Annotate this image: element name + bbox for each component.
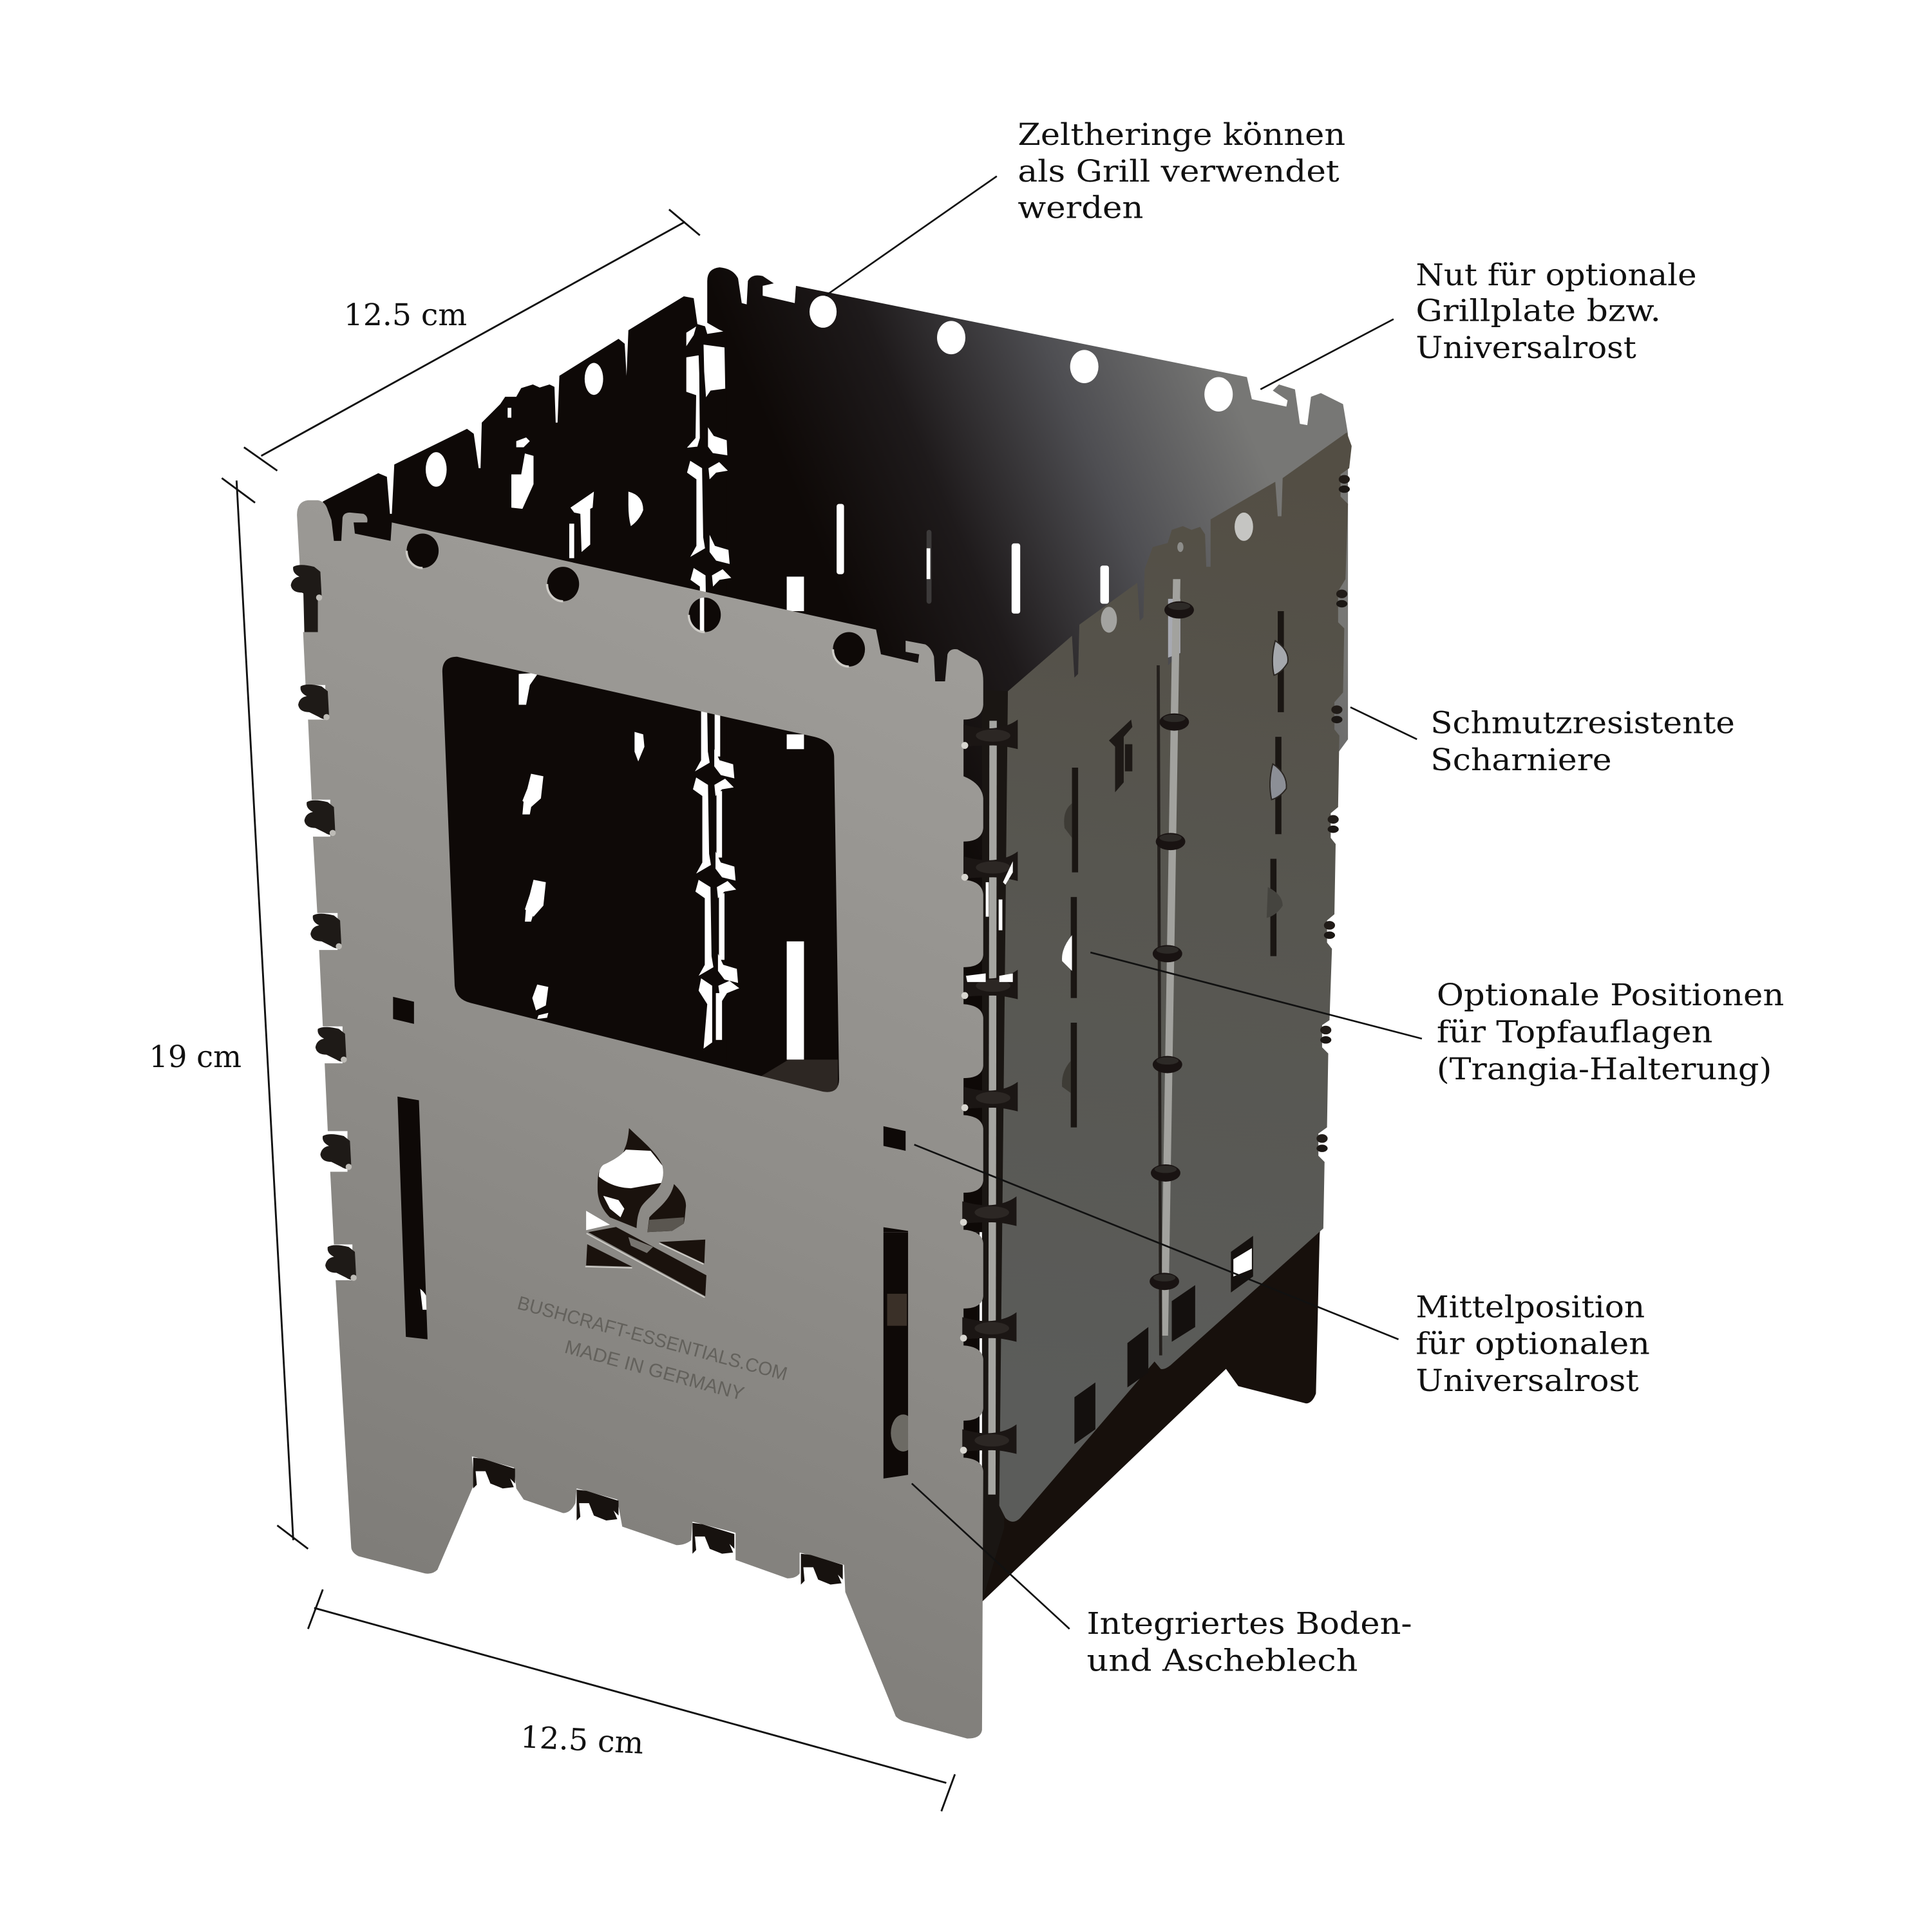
callout: groove: Nut für optionale bbox=[1416, 258, 1697, 293]
icon: campfire logo bbox=[585, 1128, 706, 1298]
rear wall grill holes bbox=[810, 296, 1233, 412]
dimension: height bbox=[222, 478, 308, 1549]
callout: hinges bbox=[1350, 705, 1735, 778]
centre hinge of side wall bbox=[1150, 579, 1194, 1356]
callout: ash plate bbox=[912, 1484, 1412, 1678]
callout: groove: Grillplate bzw. bbox=[1416, 293, 1661, 328]
front right hinge shaft bbox=[960, 719, 1018, 1495]
rear wall slots bbox=[837, 504, 1109, 614]
side wall holes bbox=[1101, 513, 1253, 632]
gap beside centre hinge bbox=[1160, 579, 1180, 661]
dimension label: 12.5 cm top: 12.5 cm bbox=[344, 298, 467, 333]
right edge hinge hooks bbox=[1316, 475, 1350, 1152]
bottom edge hinges bbox=[473, 1457, 843, 1584]
dimension label: 19 cm: 19 cm bbox=[149, 1039, 242, 1075]
panel: interior and left wall bbox=[323, 296, 980, 1484]
callout: pot supports: für Topfauflagen bbox=[1437, 1015, 1712, 1050]
side wall square slots bbox=[1074, 1236, 1253, 1444]
callout: tent pegs bbox=[826, 117, 1345, 296]
side wall slots bbox=[1062, 611, 1288, 1128]
rear corner hinge slits bbox=[687, 323, 739, 1048]
side wall Ti mark bbox=[1109, 719, 1132, 792]
callout: groove bbox=[1260, 258, 1697, 390]
dimension: bottom width bbox=[308, 1589, 955, 1811]
callout: pot supports bbox=[1090, 952, 1784, 1087]
hinge column between front and side panels bbox=[982, 690, 1008, 1602]
callout: pot supports: (Trangia-Halterung) bbox=[1437, 1052, 1772, 1087]
callout: hinges: Scharniere bbox=[1430, 743, 1612, 778]
stove illustration bbox=[291, 267, 1352, 1739]
callout: groove: Universalrost bbox=[1416, 330, 1636, 366]
dimension: top width bbox=[244, 209, 700, 471]
grill hole rims on front wall bbox=[406, 551, 849, 667]
dimension label: 12.5 cm bottom: 12.5 cm bbox=[520, 1719, 645, 1761]
callout: middle position: Universalrost bbox=[1416, 1363, 1639, 1399]
callout: tent pegs: Zeltheringe können bbox=[1018, 117, 1345, 153]
ash plate and rear leg bbox=[982, 1220, 1321, 1602]
callout: tent pegs: werden bbox=[1018, 191, 1144, 226]
panel: rear wall bbox=[707, 267, 1348, 1232]
callout: middle position: Mittelposition bbox=[1416, 1289, 1645, 1325]
callout: ash plate: und Ascheblech bbox=[1086, 1643, 1358, 1678]
callout: middle position bbox=[914, 1144, 1650, 1399]
engraved maker text: BUSHCRAFT-ESSENTIALS.COM bbox=[515, 1293, 790, 1385]
callout: pot supports: Optionale Positionen bbox=[1437, 978, 1784, 1013]
left edge hinges bbox=[291, 565, 357, 1281]
panel: right side wall bbox=[999, 433, 1352, 1522]
panel: front wall bbox=[297, 500, 983, 1739]
callout: ash plate: Integriertes Boden- bbox=[1086, 1606, 1412, 1642]
floor glimpses through openings bbox=[420, 1059, 916, 1452]
callout: hinges: Schmutzresistente bbox=[1430, 705, 1735, 741]
callout: middle position: für optionalen bbox=[1416, 1327, 1650, 1362]
engraved maker text: MADE IN GERMANY bbox=[562, 1336, 746, 1405]
callout: tent pegs: als Grill verwendet bbox=[1018, 154, 1340, 189]
left wall cut-outs bbox=[426, 363, 804, 1059]
